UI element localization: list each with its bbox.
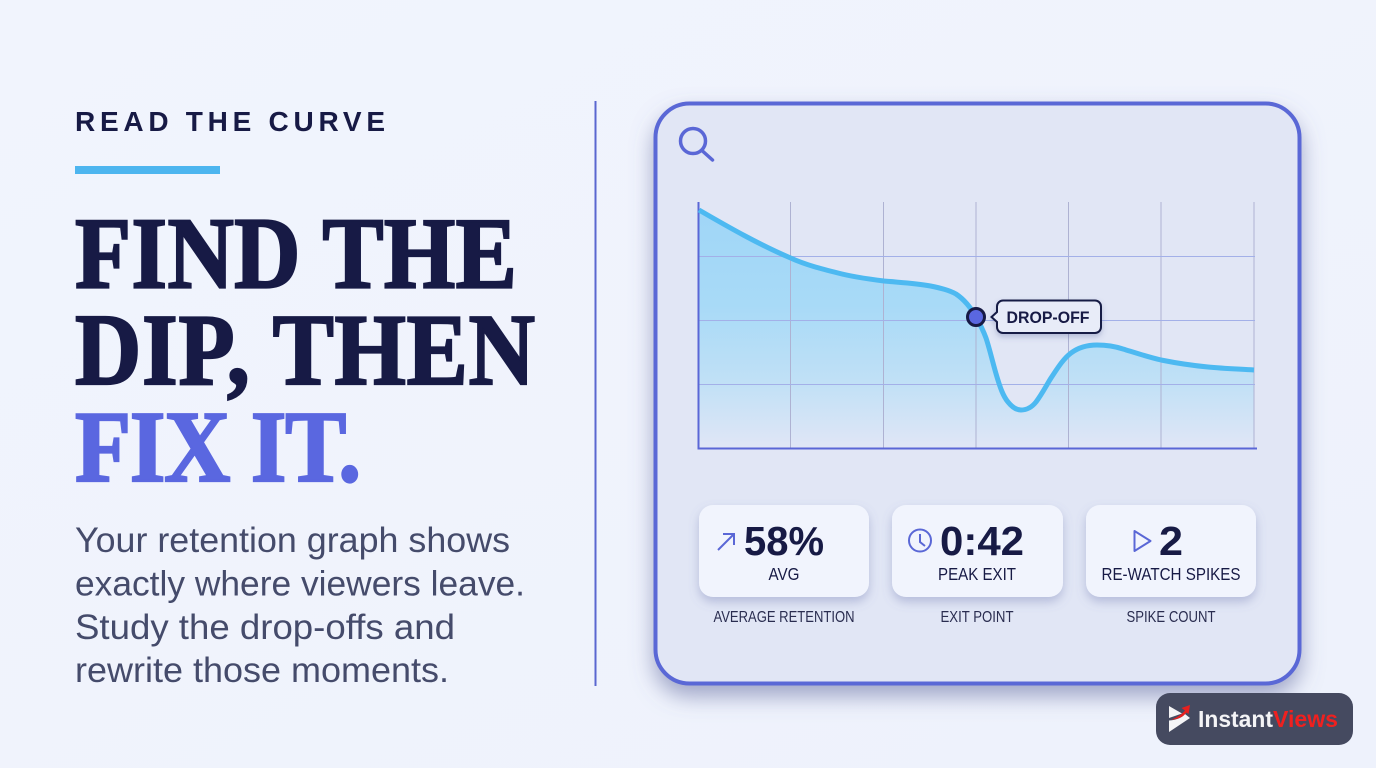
icon: up-right arrow bbox=[718, 534, 734, 550]
body text bbox=[75, 521, 525, 690]
icon: play triangle bbox=[1134, 531, 1150, 551]
chart: retention curve bbox=[698, 202, 1257, 448]
stat card: average retention: 58% bbox=[744, 518, 824, 564]
drop-off marker bbox=[968, 308, 984, 326]
stat card: average retention bbox=[699, 505, 869, 597]
headline bbox=[75, 197, 535, 503]
body text: Your retention graph shows bbox=[75, 521, 510, 560]
chart area fill bbox=[699, 210, 1254, 448]
axes bbox=[698, 202, 1257, 448]
stat card: peak exit: PEAK EXIT bbox=[938, 564, 1016, 584]
stat card: average retention: AVG bbox=[768, 564, 800, 584]
headline: FIX IT. bbox=[75, 391, 361, 503]
grid lines bbox=[699, 202, 1255, 448]
stat card: peak exit: 0:42 bbox=[940, 518, 1024, 564]
icon: logo mark bbox=[1169, 705, 1190, 732]
body text: rewrite those moments. bbox=[75, 651, 449, 690]
badge: InstantViews logo: Views bbox=[1273, 706, 1338, 732]
stat caption: exit point: EXIT POINT bbox=[940, 609, 1014, 626]
accent bar bbox=[75, 166, 220, 174]
icon: magnifying glass bbox=[680, 128, 712, 160]
stat caption: spike count: SPIKE COUNT bbox=[1126, 609, 1216, 626]
badge: InstantViews logo bbox=[1156, 693, 1353, 745]
body text: exactly where viewers leave. bbox=[75, 564, 525, 604]
retention line bbox=[699, 210, 1254, 410]
callout: drop-off bbox=[992, 300, 1101, 333]
stat card: re-watch spikes: 2 bbox=[1159, 518, 1183, 564]
stat card: peak exit bbox=[892, 505, 1063, 597]
stat card: re-watch spikes bbox=[1086, 505, 1256, 597]
headline: FIND THE bbox=[75, 197, 517, 310]
badge: InstantViews logo: Instant bbox=[1198, 706, 1273, 732]
headline: DIP, THEN bbox=[75, 294, 535, 406]
panel: retention dashboard bbox=[656, 104, 1300, 684]
callout: drop-off: DROP-OFF bbox=[1006, 308, 1090, 327]
eyebrow: read the curve: READ THE CURVE bbox=[75, 106, 385, 137]
icon: clock bbox=[909, 530, 931, 552]
body text: Study the drop-offs and bbox=[75, 608, 455, 647]
vertical divider bbox=[594, 101, 596, 686]
stat card: re-watch spikes: RE-WATCH SPIKES bbox=[1102, 564, 1240, 584]
stat caption: average retention: AVERAGE RETENTION bbox=[714, 609, 854, 626]
